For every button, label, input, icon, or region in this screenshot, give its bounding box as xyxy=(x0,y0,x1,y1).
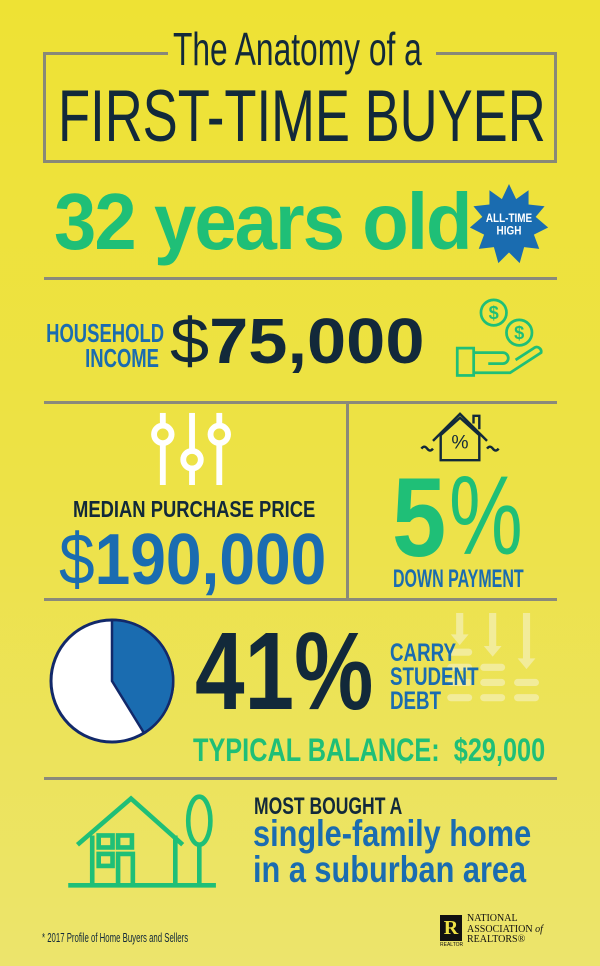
typical balance: TYPICAL BALANCE: $29,000 xyxy=(193,732,545,768)
carry student debt label xyxy=(390,639,479,715)
household income label: HOUSEHOLD xyxy=(46,318,164,348)
icon: house with percent xyxy=(420,412,500,462)
icon: faded debt arrows xyxy=(447,613,539,702)
single-family home text: single-family home xyxy=(253,813,531,854)
icon: house and tree xyxy=(68,794,216,888)
icon: house with percent: % xyxy=(451,433,469,454)
carry student debt label: DEBT xyxy=(390,687,441,715)
logo: NAR: ASSOCIATION of xyxy=(467,924,543,934)
badge: all-time high: ALL-TIME xyxy=(486,213,532,225)
household income label: INCOME xyxy=(85,343,159,373)
icon: sliders xyxy=(151,412,231,485)
icon: hand with coins: $ xyxy=(514,323,524,343)
pie chart xyxy=(50,618,174,744)
down payment stat: 5 xyxy=(392,455,446,580)
household income value: $75,000 xyxy=(170,305,424,377)
down payment stat: % xyxy=(449,453,523,578)
title line 2: FIRST-TIME BUYER xyxy=(58,76,546,157)
icon: hand with coins xyxy=(456,298,543,377)
badge: all-time high xyxy=(470,184,548,264)
age stat: 32 years old xyxy=(54,177,471,266)
footnote: * 2017 Profile of Home Buyers and Sellers xyxy=(42,930,188,945)
logo: NAR: REALTOR xyxy=(440,942,463,948)
single-family home text xyxy=(253,813,531,890)
logo: NAR: NATIONAL xyxy=(467,913,518,924)
carry student debt label: CARRY xyxy=(390,639,456,667)
median purchase price label: MEDIAN PURCHASE PRICE xyxy=(73,496,315,522)
title line 1: The Anatomy of a xyxy=(173,23,422,75)
logo: NAR: R xyxy=(444,917,458,939)
single-family home text: in a suburban area xyxy=(253,849,526,890)
median purchase price value: $190,000 xyxy=(59,520,326,600)
logo: NAR xyxy=(440,913,544,948)
badge: all-time high: HIGH xyxy=(497,226,521,238)
down payment stat xyxy=(392,453,523,580)
household income label xyxy=(46,318,164,373)
carry student debt label: STUDENT xyxy=(390,663,479,691)
logo: NAR: REALTORS® xyxy=(467,934,525,945)
student debt percent: 41% xyxy=(195,610,373,733)
most bought label: MOST BOUGHT A xyxy=(254,793,402,820)
title box xyxy=(43,52,557,163)
down payment label: DOWN PAYMENT xyxy=(393,565,524,593)
icon: hand with coins: $ xyxy=(489,303,499,323)
